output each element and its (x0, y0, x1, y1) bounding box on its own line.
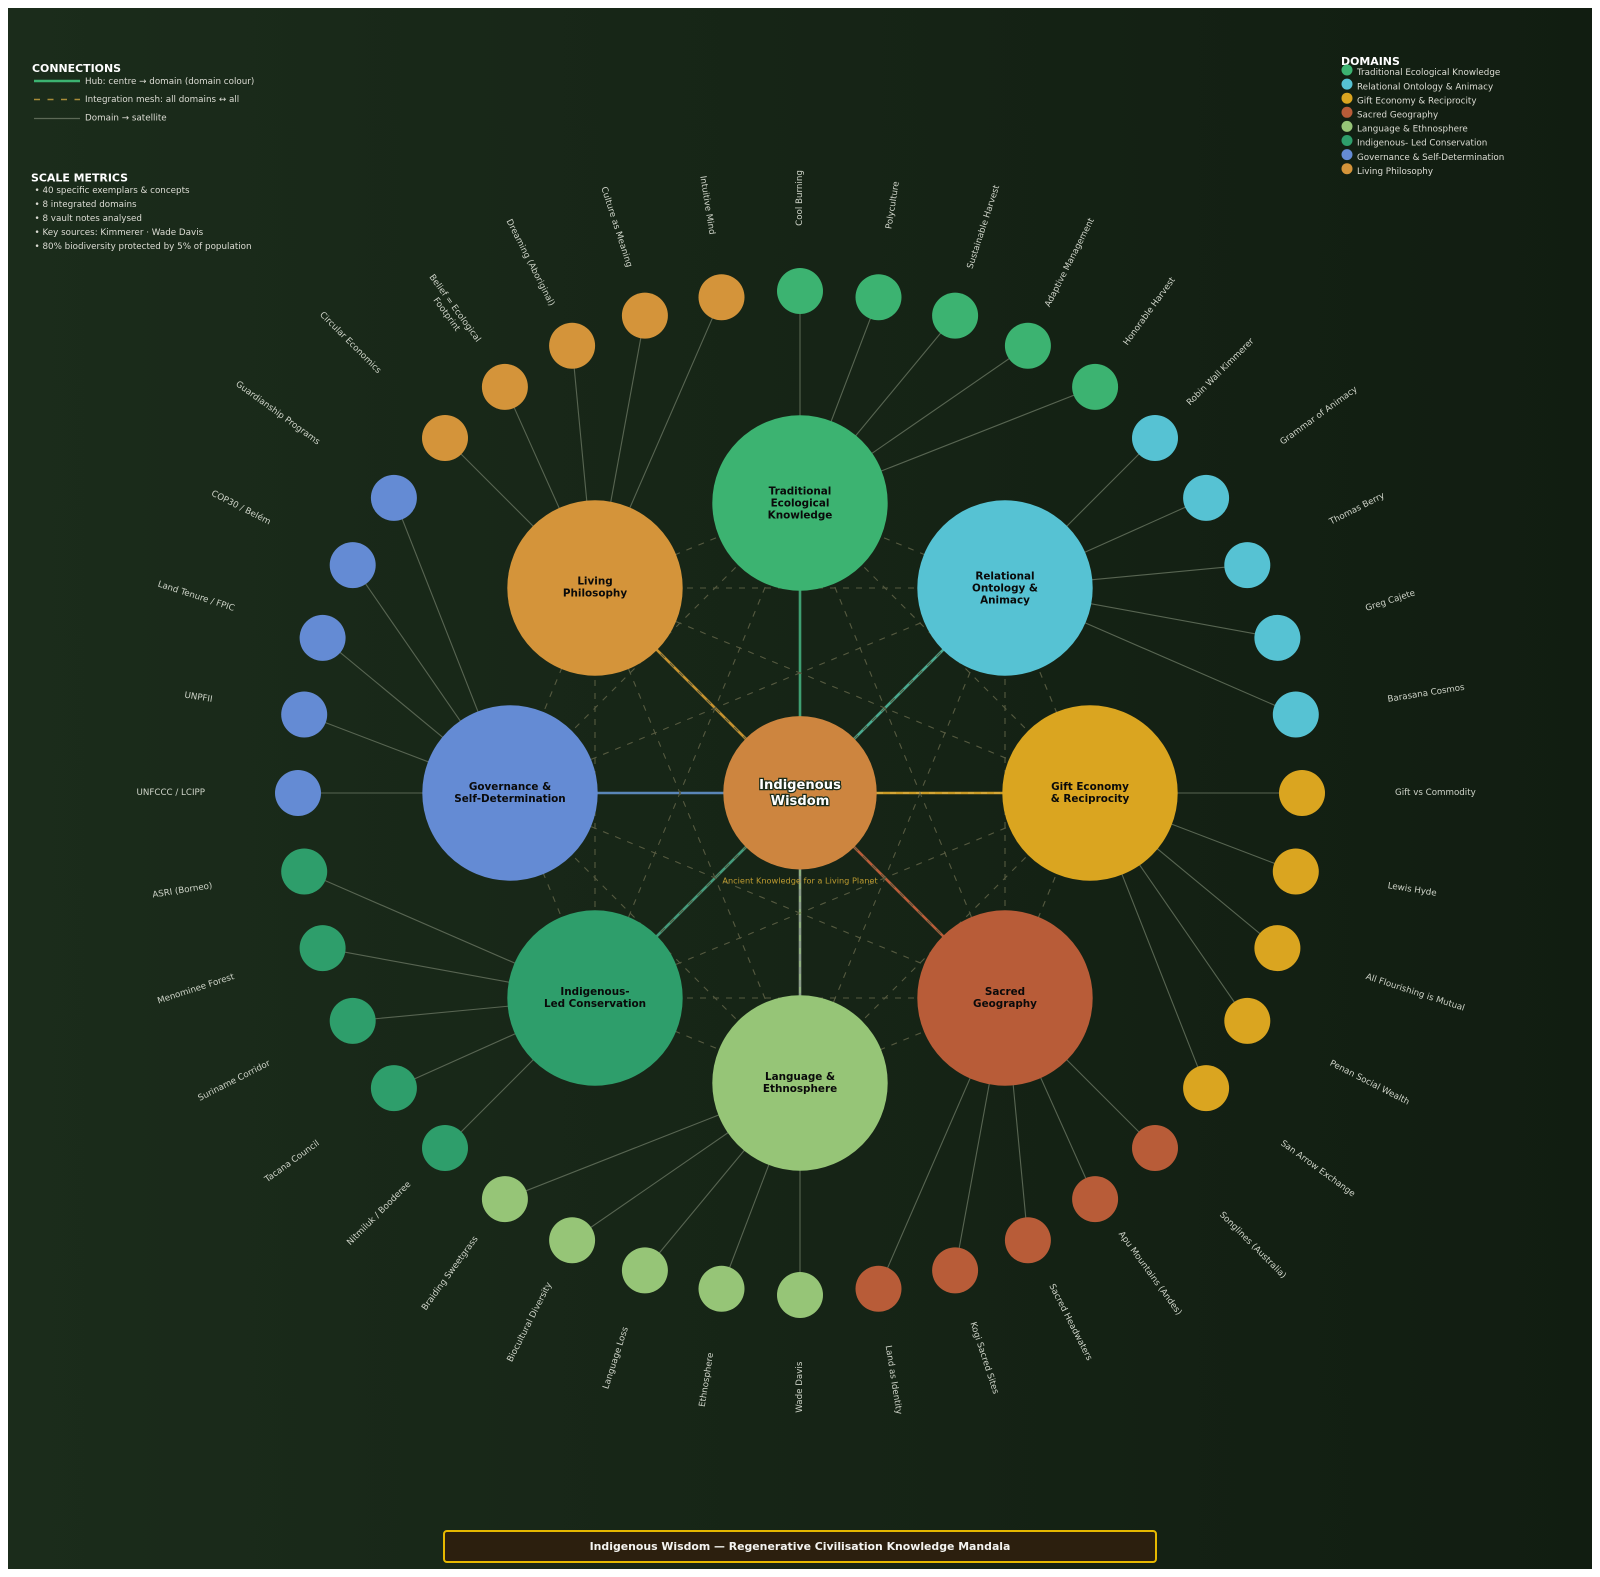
central hub: Indigenous Wisdom: Indigenous (759, 778, 841, 793)
satellite: Greg Cajete: Greg Cajete (1364, 588, 1417, 614)
satellite: Wade Davis: Wade Davis (795, 1361, 805, 1413)
satellite: All Flourishing is Mutual (1090, 793, 1466, 1014)
satellite: Nitmiluk / Booderee (345, 998, 595, 1248)
domain: Sacred Geography: Geography (973, 998, 1037, 1010)
satellite: Biocultural Diversity: Biocultural Diversity (505, 1281, 554, 1364)
domain: Indigenous-Led Conservation (507, 910, 683, 1086)
satellite: Adaptive Management (800, 216, 1097, 503)
satellites: Traditional Ecological Knowledge (777, 170, 1178, 503)
satellite: All Flourishing is Mutual: All Flourishing is Mutual (1364, 972, 1466, 1014)
satellite: Sustainable Harvest: Sustainable Harvest (966, 183, 1002, 270)
scale metrics list (34, 186, 252, 252)
satellite: Polyculture: Polyculture (884, 181, 902, 230)
scale metrics list: • 80% biodiversity protected by 5% of population (34, 242, 252, 252)
satellite: Land Tenure / FPIC: Land Tenure / FPIC (156, 580, 236, 614)
domain key: Living Philosophy: Living Philosophy (1357, 167, 1433, 177)
satellite: Wade Davis (777, 1083, 823, 1413)
satellite: Language Loss: Language Loss (601, 1325, 631, 1390)
satellite: Menominee Forest (156, 925, 595, 1006)
satellite: Braiding Sweetgrass: Braiding Sweetgrass (420, 1234, 481, 1313)
satellite: Guardianship Programs (233, 380, 510, 793)
satellite: Circular Economics (317, 310, 595, 588)
satellite: Adaptive Management: Adaptive Management (1043, 216, 1097, 309)
scale metrics list: • 8 vault notes analysed (34, 214, 142, 224)
satellite: Land as Identity: Land as Identity (883, 1345, 904, 1415)
satellite: UNFCCC / LCIPP: UNFCCC / LCIPP (137, 788, 205, 798)
domain key: Governance & Self-Determination (1342, 149, 1504, 163)
satellites: Relational Ontology & Animacy (1005, 336, 1466, 738)
domain: Sacred Geography: Sacred (985, 986, 1025, 998)
satellite: COP30 / Belém: COP30 / Belém (209, 488, 273, 527)
integration mesh: all domains to all (510, 503, 1090, 1083)
domain key: Indigenous-Led Conservation: Indigenous- Led Conservation (1357, 139, 1487, 149)
scale metrics heading: SCALE METRICS (31, 172, 128, 184)
domain: Language & Ethnosphere: Language & (765, 1071, 835, 1083)
subtitle under hub: Ancient Knowledge for a Living Planet (722, 876, 878, 886)
legend entry: mesh line: Integration mesh: all domains ↔ all (85, 95, 239, 105)
scale metrics list: • Key sources: Kimmerer · Wade Davis (34, 228, 204, 238)
satellite: Penan Social Wealth (1090, 793, 1411, 1107)
legend entry: satellite line: Domain → satellite (85, 114, 167, 124)
satellite: Intuitive Mind: Intuitive Mind (697, 175, 716, 235)
satellite: Belief = Ecological Footprint: Belief = Ecological (427, 273, 482, 344)
domain: Indigenous-Led Conservation: Indigenous- (560, 986, 630, 998)
satellite: UNFCCC / LCIPP (137, 770, 510, 816)
legend heading: CONNECTIONS (32, 62, 121, 75)
satellite: ASRI (Borneo): ASRI (Borneo) (152, 881, 213, 900)
satellite: Belief = Ecological Footprint (418, 273, 595, 588)
satellite: UNPFII (184, 691, 510, 793)
domain key: Governance & Self-Determination: Governance & Self-Determination (1357, 153, 1504, 163)
domain key: Indigenous-Led Conservation (1342, 135, 1487, 149)
domain: Governance & Self-Determination (422, 705, 598, 881)
satellite: Menominee Forest: Menominee Forest (156, 972, 236, 1006)
satellite: Dreaming (Aboriginal) (504, 218, 595, 588)
satellite: UNPFII: UNPFII (184, 691, 213, 705)
satellite: Barasana Cosmos (1005, 588, 1466, 738)
domain: Language & Ethnosphere: Ethnosphere (763, 1083, 837, 1095)
scale metrics panel (31, 172, 252, 252)
domain: Sacred Geography (917, 910, 1093, 1086)
hub spokes: centre to domains (510, 503, 1090, 1083)
satellite: Kogi Sacred Sites (932, 998, 1005, 1396)
legend entry: hub line: Hub: centre → domain (domain colour) (85, 77, 254, 87)
central hub: Indigenous Wisdom: Wisdom (771, 794, 829, 809)
satellites: Indigenous-Led Conservation (152, 848, 595, 1248)
central hub: Indigenous Wisdom (723, 716, 877, 870)
domain key: Traditional Ecological Knowledge (1342, 64, 1500, 78)
satellite: Honorable Harvest: Honorable Harvest (1122, 275, 1178, 347)
domain key: Sacred Geography (1342, 107, 1438, 120)
satellite: Sacred Headwaters (1005, 998, 1094, 1363)
satellite: Cool Burning: Cool Burning (795, 170, 805, 226)
satellites: Governance & Self-Determination (137, 380, 510, 816)
legend: domains (1341, 55, 1504, 177)
mesh overlay on lower spoke (800, 793, 1000, 1083)
satellite: Language Loss (601, 1083, 800, 1390)
scale metrics list: • 40 specific exemplars & concepts (34, 186, 190, 196)
satellite: Songlines (Australia): Songlines (Australia) (1217, 1210, 1288, 1281)
satellite: San Arrow Exchange (1090, 793, 1357, 1199)
satellite: Thomas Berry: Thomas Berry (1327, 491, 1387, 528)
satellite: COP30 / Belém (209, 488, 510, 793)
satellite: Gift vs Commodity: Gift vs Commodity (1395, 788, 1476, 798)
scale metrics list: • 8 integrated domains (34, 200, 137, 210)
satellite: Apu Mountains (Andes): Apu Mountains (Andes) (1116, 1230, 1183, 1317)
satellite: Lewis Hyde (1090, 793, 1437, 899)
domains heading: DOMAINS (1341, 55, 1400, 68)
domain: Governance & Self-Determination: Governance & (469, 781, 551, 793)
satellite: Braiding Sweetgrass (420, 1083, 800, 1313)
satellite: Circular Economics: Circular Economics (317, 310, 383, 376)
domain: Gift Economy & Reciprocity (1002, 705, 1178, 881)
legend entry: satellite line (34, 114, 167, 124)
domain: Gift Economy & Reciprocity: & Reciprocity (1051, 793, 1130, 805)
satellite: Culture as Meaning (595, 186, 668, 588)
domain key: Sacred Geography: Sacred Geography (1357, 110, 1438, 120)
domain key: Traditional Ecological Knowledge: Traditional Ecological Knowledge (1356, 68, 1500, 78)
satellite: Dreaming (Aboriginal): Dreaming (Aboriginal) (504, 218, 556, 308)
footer title banner (444, 1531, 1156, 1562)
satellite: Grammar of Animacy (1005, 385, 1360, 588)
satellite: Penan Social Wealth: Penan Social Wealth (1328, 1059, 1411, 1107)
satellite: Ethnosphere (698, 1083, 800, 1408)
satellite: Apu Mountains (Andes) (1005, 998, 1183, 1317)
domain: Relational Ontology & Animacy: Ontology & (972, 582, 1038, 594)
satellite: ASRI (Borneo) (152, 848, 595, 998)
domain key: Gift Economy & Reciprocity (1342, 93, 1477, 106)
satellite: Land Tenure / FPIC (156, 580, 510, 793)
satellite: Cool Burning (777, 170, 823, 503)
satellite: Intuitive Mind (595, 175, 744, 588)
satellites: Gift Economy & Reciprocity (1090, 770, 1476, 1199)
domain key: Language & Ethnosphere: Language & Ethnosphere (1357, 125, 1468, 135)
satellite: Thomas Berry (1005, 491, 1387, 588)
domain: Traditional Ecological Knowledge: Traditional (769, 485, 831, 497)
domain key: Gift Economy & Reciprocity: Gift Economy & Reciprocity (1357, 96, 1477, 106)
satellite: Sustainable Harvest (800, 183, 1002, 503)
satellites: Sacred Geography (856, 998, 1288, 1415)
satellite: Robin Wall Kimmerer: Robin Wall Kimmerer (1185, 336, 1257, 408)
satellite: Suriname Corridor (197, 998, 595, 1104)
footer title banner: Indigenous Wisdom — Regenerative Civilisation Knowledge Mandala (590, 1540, 1010, 1553)
satellites: Language & Ethnosphere (420, 1083, 823, 1413)
domain key: Living Philosophy (1342, 163, 1433, 177)
domain: Indigenous-Led Conservation: Led Conservation (544, 998, 646, 1010)
satellite: Nitmiluk / Booderee: Nitmiluk / Booderee (345, 1180, 413, 1248)
domain: Gift Economy & Reciprocity: Gift Economy (1051, 781, 1129, 793)
satellites: Living Philosophy (317, 175, 744, 588)
satellite: Songlines (Australia) (1005, 998, 1288, 1281)
domain: Living Philosophy: Philosophy (563, 588, 627, 600)
domain: Traditional Ecological Knowledge (712, 415, 888, 591)
satellite: Belief = Ecological Footprint: Footprint (431, 296, 462, 334)
satellite: Honorable Harvest (800, 275, 1178, 503)
domain: Living Philosophy: Living (577, 576, 613, 588)
domain: Living Philosophy (507, 500, 683, 676)
satellite: Polyculture (800, 181, 902, 503)
domain: Traditional Ecological Knowledge: Knowledge (768, 509, 832, 521)
satellite: Biocultural Diversity (505, 1083, 800, 1364)
satellite: Culture as Meaning: Culture as Meaning (598, 186, 634, 269)
satellite: San Arrow Exchange: San Arrow Exchange (1278, 1139, 1357, 1199)
satellite: Grammar of Animacy: Grammar of Animacy (1278, 385, 1360, 447)
satellite: Suriname Corridor: Suriname Corridor (197, 1058, 272, 1104)
satellite: Sacred Headwaters: Sacred Headwaters (1046, 1282, 1094, 1363)
domain: Governance & Self-Determination: Self-Determination (454, 793, 566, 805)
satellite: Greg Cajete (1005, 588, 1417, 661)
domain: Traditional Ecological Knowledge: Ecological (771, 497, 829, 509)
satellite: Land as Identity (856, 998, 1005, 1415)
satellite: Ethnosphere: Ethnosphere (698, 1352, 716, 1408)
domain: Relational Ontology & Animacy: Relational (975, 570, 1035, 582)
satellite: Lewis Hyde: Lewis Hyde (1387, 881, 1437, 899)
satellite: Kogi Sacred Sites: Kogi Sacred Sites (968, 1321, 1000, 1396)
domain: Relational Ontology & Animacy (917, 500, 1093, 676)
domain key: Relational Ontology & Animacy: Relational Ontology & Animacy (1357, 82, 1493, 92)
satellite: Tacana Council: Tacana Council (262, 1139, 322, 1185)
satellite: Tacana Council (262, 998, 595, 1185)
domain: Relational Ontology & Animacy: Animacy (980, 594, 1030, 606)
domain key: Language & Ethnosphere (1342, 121, 1468, 135)
satellite: Gift vs Commodity (1090, 770, 1476, 816)
satellite: Robin Wall Kimmerer (1005, 336, 1257, 588)
legend: connections (32, 62, 254, 124)
domain key: Relational Ontology & Animacy (1342, 79, 1493, 92)
domain: Language & Ethnosphere (712, 995, 888, 1171)
satellite: Guardianship Programs: Guardianship Programs (233, 380, 322, 448)
satellite: Barasana Cosmos: Barasana Cosmos (1387, 683, 1466, 705)
